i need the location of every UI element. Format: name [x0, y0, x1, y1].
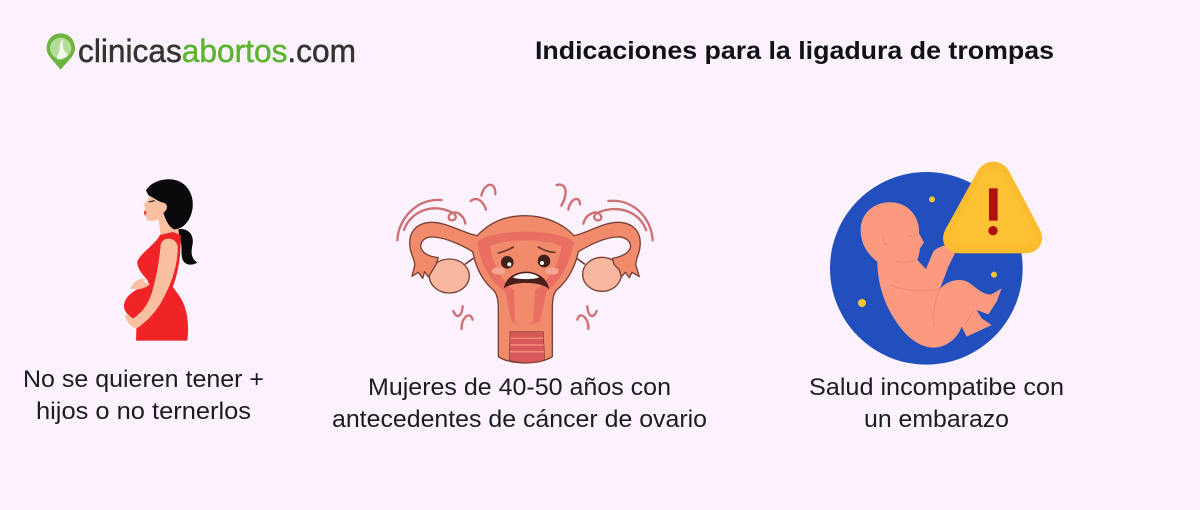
eyelash — [149, 201, 155, 202]
logo: clinicasabortos.com — [47, 33, 356, 70]
lips — [144, 211, 146, 216]
stars — [929, 196, 935, 202]
icon: fetus with warning — [830, 162, 1042, 365]
fetus creases — [883, 235, 974, 326]
caption — [23, 366, 264, 425]
cheeks — [492, 267, 505, 275]
exclamation mark — [989, 188, 998, 221]
ponytail — [177, 229, 197, 265]
ovaries — [429, 259, 469, 293]
hair — [146, 179, 193, 229]
panel: no more children — [23, 179, 264, 425]
fetus — [861, 202, 1002, 348]
panel: ovarian cancer — [332, 185, 707, 433]
hand on belly — [131, 279, 150, 289]
thin ligaments — [465, 258, 585, 264]
arm — [125, 239, 178, 328]
panel: incompatible health — [809, 162, 1064, 433]
brows — [498, 247, 555, 253]
body and tubes — [410, 216, 640, 363]
shake lines — [397, 185, 653, 329]
logo text: clinicasabortos.com — [78, 33, 356, 69]
inner cavity — [477, 232, 574, 326]
caption: antecedentes de cáncer de ovario — [332, 406, 707, 433]
caption: Salud incompatibe con — [809, 374, 1064, 401]
cervix — [509, 332, 545, 363]
icon: uterus character — [397, 185, 653, 363]
caption: No se quieren tener + — [23, 366, 264, 393]
caption — [332, 374, 707, 433]
title: Indicaciones para la ligadura de trompas — [535, 37, 1054, 65]
caption — [809, 374, 1064, 433]
mouth — [504, 272, 549, 289]
blue circle — [830, 172, 1023, 365]
caption: un embarazo — [864, 406, 1009, 433]
icon: pregnant woman — [124, 179, 197, 341]
dress — [124, 232, 188, 341]
caption: Mujeres de 40-50 años con — [368, 374, 671, 401]
eyes — [501, 256, 514, 269]
icon: logo pin — [47, 33, 75, 70]
skin — [143, 193, 179, 237]
warning triangle — [943, 162, 1042, 253]
caption: hijos o no ternerlos — [36, 398, 251, 425]
